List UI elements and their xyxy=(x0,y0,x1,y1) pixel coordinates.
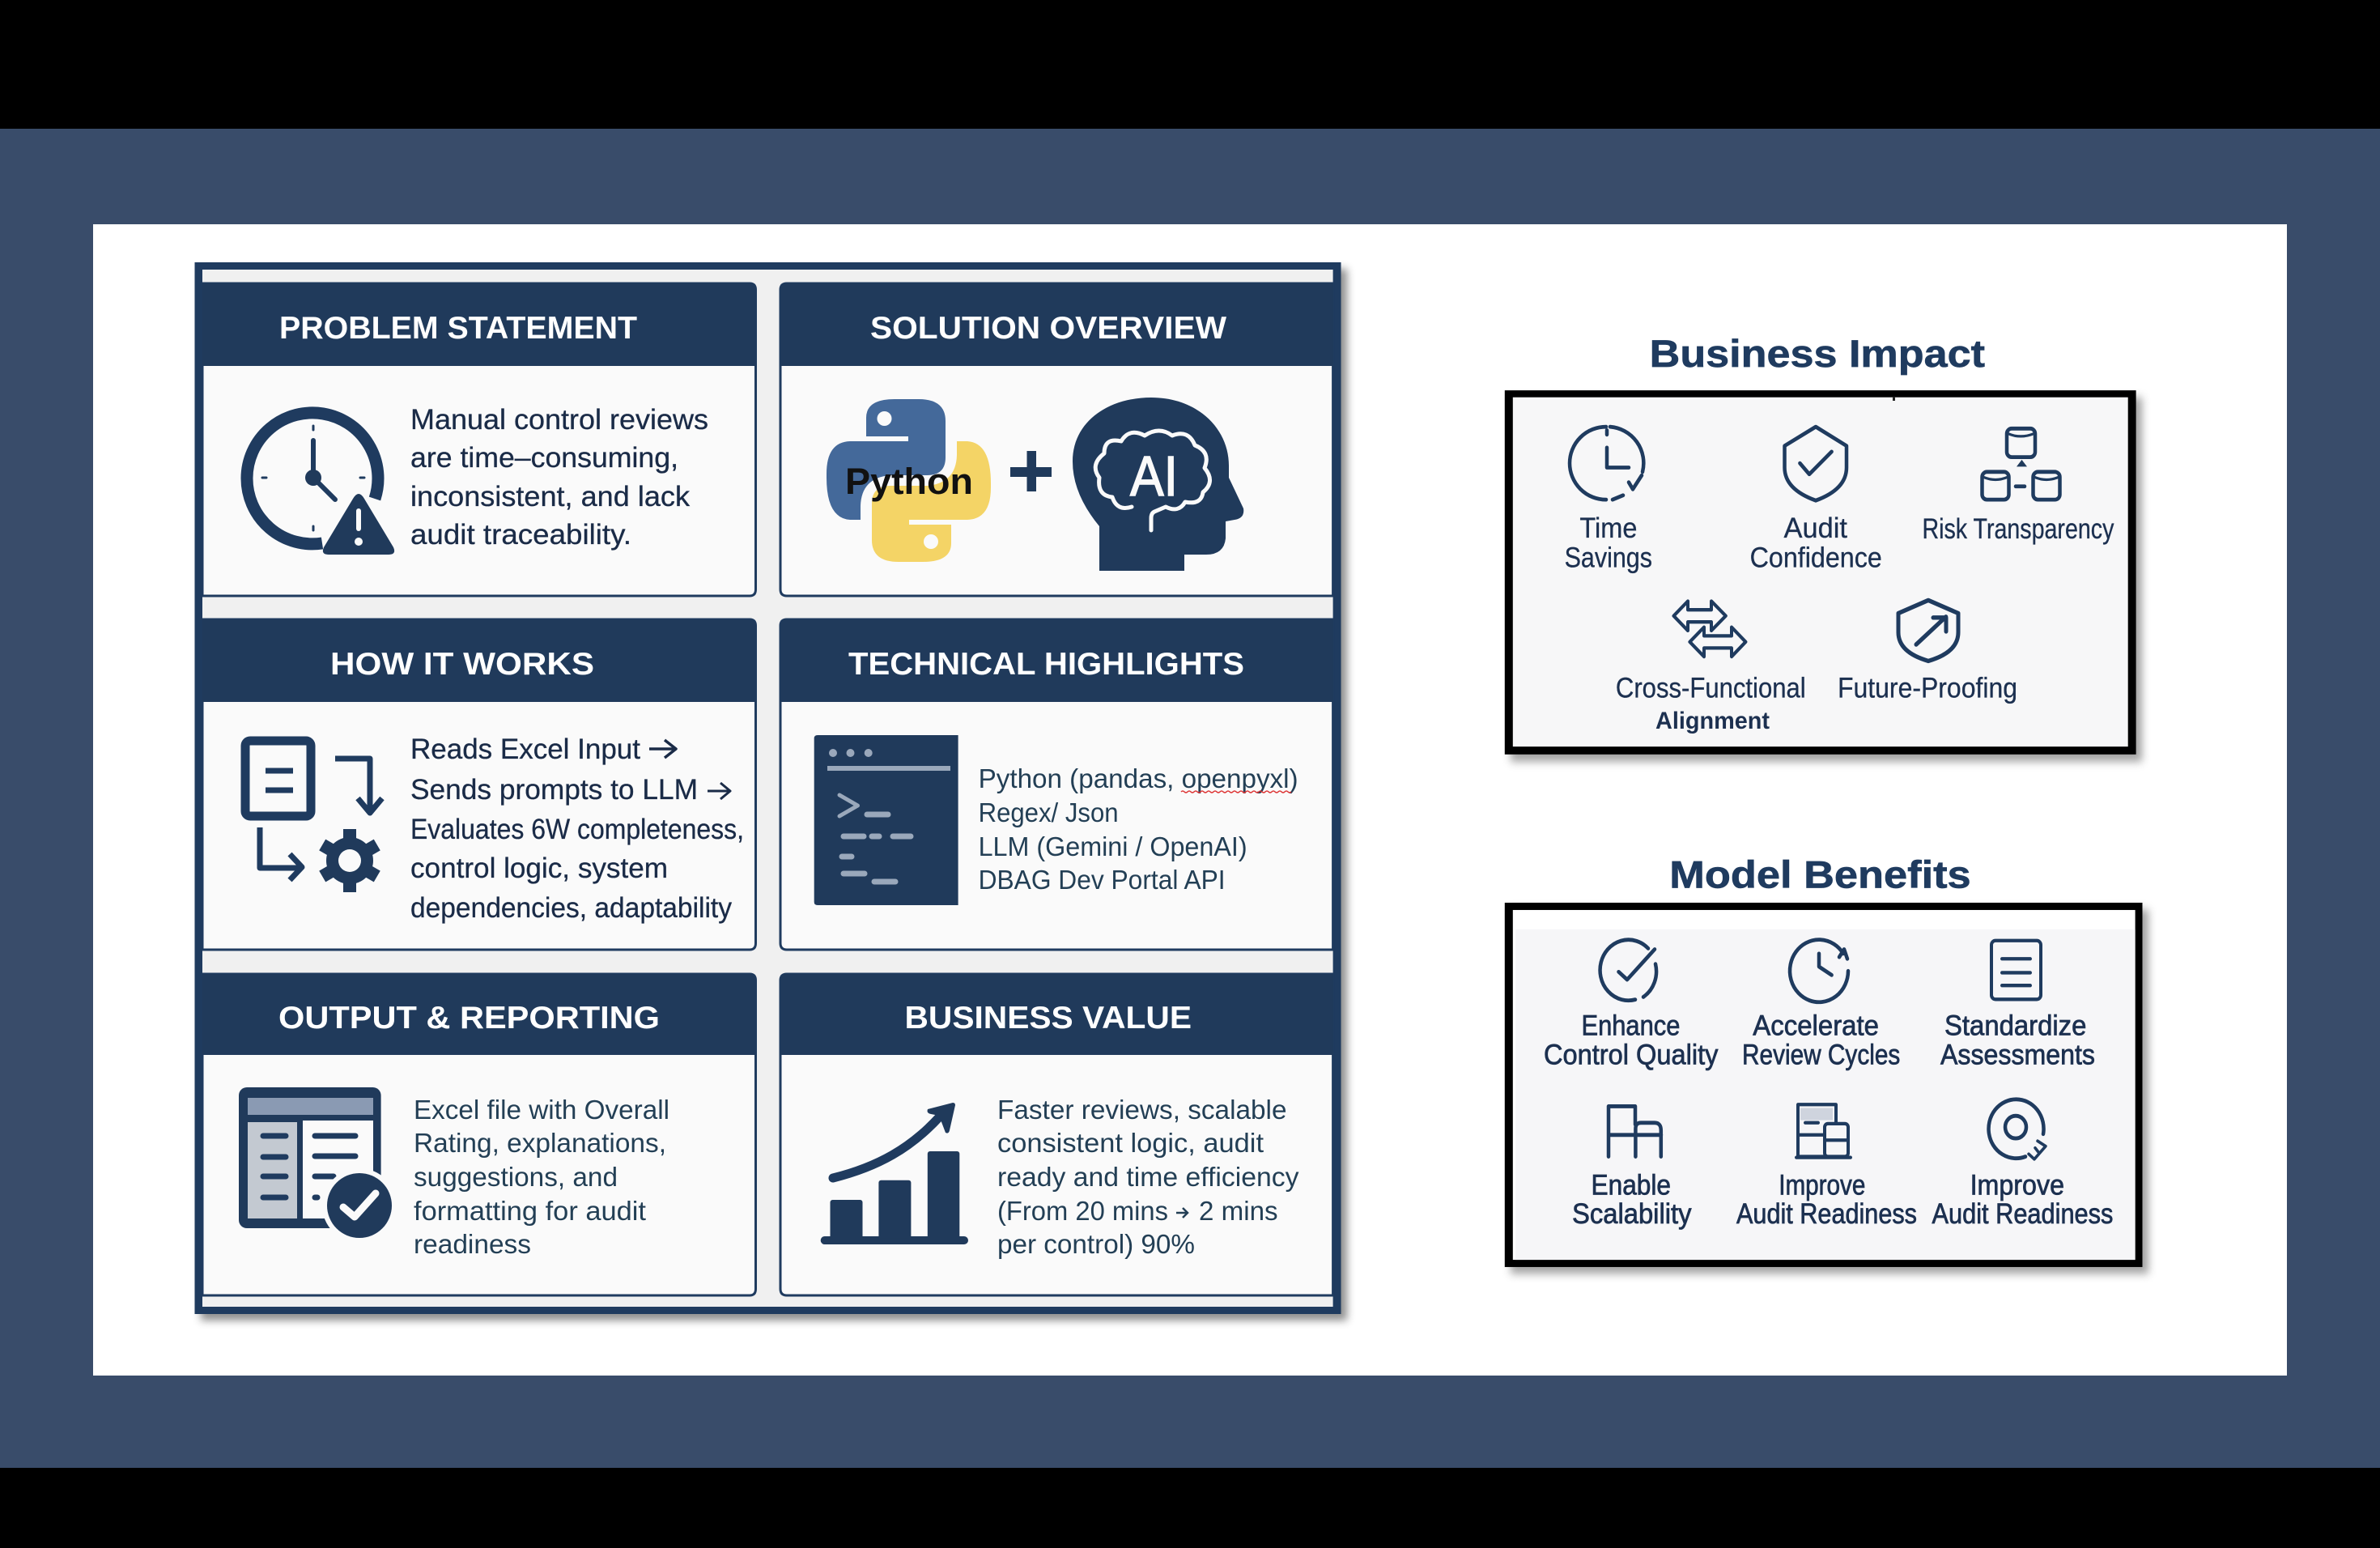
text: business value description: per control) 90% xyxy=(997,1229,1195,1259)
icon: time savings clock xyxy=(1570,427,1643,500)
label: improve audit readiness xyxy=(1736,1170,1917,1230)
label: improve audit readiness: Improve xyxy=(1779,1170,1865,1201)
label: standardize assessments: Standardize xyxy=(1944,1010,2086,1042)
label: improve audit readiness: Audit Readiness xyxy=(1736,1198,1917,1230)
icon: python logo: Python xyxy=(845,461,973,502)
label: cross-functional alignment: Cross-Functional xyxy=(1616,672,1806,704)
text: problem description: inconsistent, and lack xyxy=(410,481,691,512)
text: how it works steps xyxy=(410,734,744,924)
text: problem description: audit traceability. xyxy=(410,519,631,551)
label: enhance control quality: Control Quality xyxy=(1544,1040,1719,1071)
label: audit confidence: Audit xyxy=(1784,512,1847,544)
label: enable scalability: Scalability xyxy=(1572,1198,1692,1230)
text: business value description: consistent logic, audit xyxy=(997,1128,1264,1158)
panel: technical highlights xyxy=(780,619,1333,950)
label: enable scalability xyxy=(1572,1170,1692,1230)
heading: solution overview: SOLUTION OVERVIEW xyxy=(870,311,1226,346)
text: problem description: are time–consuming, xyxy=(410,442,678,474)
text: business value description: 2 mins xyxy=(1199,1196,1278,1226)
text: how it works steps: control logic, system xyxy=(410,853,668,884)
label: accelerate review cycles: Review Cycles xyxy=(1742,1040,1900,1071)
text: how it works steps: Sends prompts to LLM xyxy=(410,774,698,806)
icon: accelerate review cycles xyxy=(1790,940,1848,1002)
heading: output and reporting: OUTPUT & REPORTING xyxy=(278,1001,660,1036)
label: time savings xyxy=(1565,512,1652,574)
text: problem description: Manual control reviews xyxy=(410,404,708,436)
heading: how it works: HOW IT WORKS xyxy=(330,647,594,682)
text: how it works steps: Reads Excel Input xyxy=(410,734,640,765)
heading: technical highlights: TECHNICAL HIGHLIGHTS xyxy=(848,647,1244,682)
text: output description xyxy=(414,1095,669,1259)
icon: standardize assessments document xyxy=(1991,941,2041,999)
heading: business value: BUSINESS VALUE xyxy=(905,1001,1192,1036)
label: standardize assessments: Assessments xyxy=(1940,1040,2095,1071)
label: improve audit readiness second: Audit Readiness xyxy=(1932,1198,2113,1230)
label: improve audit readiness second: Improve xyxy=(1970,1170,2064,1201)
icon: document flow with gear xyxy=(245,741,382,892)
label: standardize assessments xyxy=(1940,1010,2095,1071)
icon: audit readiness target xyxy=(1989,1099,2046,1159)
panel: how it works xyxy=(202,619,756,950)
label: enhance control quality: Enhance xyxy=(1582,1010,1680,1042)
text: technical list: LLM (Gemini / OpenAI) xyxy=(979,831,1247,861)
text: how it works steps: dependencies, adaptability xyxy=(410,892,732,924)
label: risk transparency: Risk Transparency xyxy=(1922,513,2114,545)
text: technical list: DBAG Dev Portal API xyxy=(979,865,1226,895)
icon: AI head xyxy=(1073,398,1243,571)
panel: business value xyxy=(780,974,1333,1295)
text: business value description xyxy=(997,1095,1299,1259)
text: problem description xyxy=(410,404,708,551)
label: improve audit readiness second xyxy=(1932,1170,2113,1230)
panel: output and reporting xyxy=(202,974,756,1295)
label: enhance control quality xyxy=(1544,1010,1719,1071)
text: technical list xyxy=(979,763,1298,895)
text: output description: Excel file with Overall xyxy=(414,1095,669,1125)
panel: solution overview xyxy=(780,283,1333,596)
panel: business impact xyxy=(1505,390,2142,762)
label: time savings: Time xyxy=(1579,512,1637,544)
icon: terminal window xyxy=(814,735,958,905)
icon: clock with warning xyxy=(247,413,398,559)
label: cross-functional alignment: Alignment xyxy=(1655,708,1770,734)
label: enable scalability: Enable xyxy=(1592,1170,1671,1201)
icon: future-proofing shield xyxy=(1898,600,1958,661)
label: accelerate review cycles xyxy=(1742,1010,1900,1071)
text: output description: suggestions, and xyxy=(414,1162,618,1192)
icon: python logo xyxy=(827,399,991,562)
heading: business impact: Business Impact xyxy=(1650,333,1985,376)
text: business value description: (From 20 mins xyxy=(997,1196,1168,1226)
label: audit confidence xyxy=(1750,512,1882,574)
text: output description: Rating, explanations, xyxy=(414,1128,666,1158)
text: technical list: Regex/ Json xyxy=(979,797,1119,827)
icon: enable scalability blocks xyxy=(1609,1106,1661,1157)
text: business value description: Faster reviews, scalable xyxy=(997,1095,1287,1125)
icon: rising bar chart xyxy=(821,1103,968,1244)
icon: enhance control quality xyxy=(1600,940,1656,1001)
text: technical list: Python (pandas, openpyxl) xyxy=(979,763,1298,793)
icon: cross-functional arrows xyxy=(1674,601,1745,657)
icon: audit readiness documents xyxy=(1796,1104,1851,1158)
text: how it works steps: Evaluates 6W completeness, xyxy=(410,814,744,845)
panel: problem statement xyxy=(202,283,756,596)
heading: model benefits: Model Benefits xyxy=(1669,853,1971,896)
text: business value description: ready and time efficiency xyxy=(997,1162,1299,1192)
icon: report with check badge xyxy=(239,1087,397,1243)
label: audit confidence: Confidence xyxy=(1750,542,1882,574)
heading: problem statement: PROBLEM STATEMENT xyxy=(279,311,637,346)
icon: AI head: AI xyxy=(1130,444,1178,508)
icon: audit shield xyxy=(1784,427,1847,500)
label: time savings: Savings xyxy=(1565,542,1652,574)
label: cross-functional alignment xyxy=(1616,672,1806,734)
icon: plus sign xyxy=(1010,451,1052,491)
icon: risk transparency databases xyxy=(1982,428,2059,500)
text: output description: readiness xyxy=(414,1229,531,1259)
panel: model benefits xyxy=(1505,903,2148,1274)
label: accelerate review cycles: Accelerate xyxy=(1753,1010,1879,1042)
label: future-proofing: Future-Proofing xyxy=(1838,672,2017,704)
text: output description: formatting for audit xyxy=(414,1196,646,1226)
